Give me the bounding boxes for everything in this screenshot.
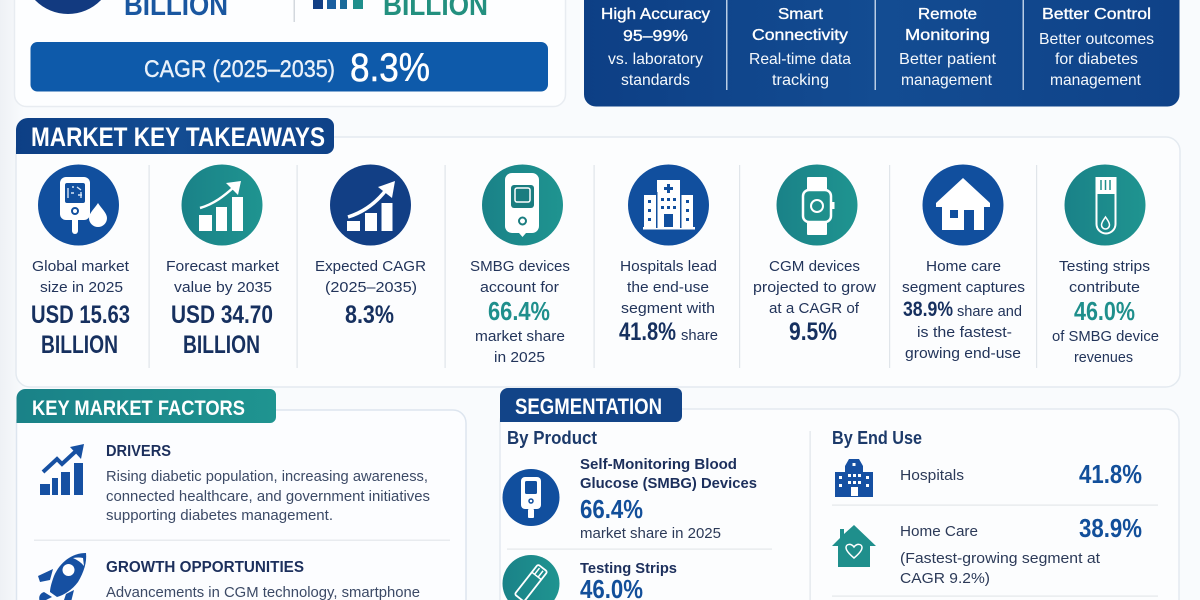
takeaway: global market size: size in 2025 (40, 279, 123, 296)
heading: key market factors: KEY MARKET FACTORS (32, 397, 245, 420)
text: growth opportunities (106, 559, 420, 600)
column: by product: By Product (507, 428, 597, 448)
icon: home with heart (832, 525, 876, 567)
takeaway: hospitals: 41.8% (619, 318, 676, 346)
heading: segmentation: SEGMENTATION (515, 394, 662, 419)
item: SMBG devices: Self-Monitoring Blood (580, 456, 737, 473)
takeaway: home care: 38.9% (903, 298, 953, 321)
takeaway: testing strips (1052, 164, 1159, 366)
CAGR banner (30, 42, 548, 92)
item: home care (900, 513, 1142, 587)
column: by product (502, 428, 772, 600)
column: by end use (832, 428, 1158, 597)
takeaway: testing strips: revenues (1074, 349, 1133, 366)
takeaway: CGM devices: 9.5% (789, 318, 837, 346)
benefit: high accuracy (601, 6, 710, 89)
benefit: high accuracy: standards (621, 72, 690, 89)
heading: segmentation (500, 388, 682, 422)
icon: hospital (628, 164, 709, 246)
panel: segmentation (500, 388, 1179, 600)
icon: rising bars navy (330, 164, 411, 246)
takeaway: global market size: Global market (32, 258, 130, 275)
icon: market size circle (22, 0, 114, 14)
takeaway: SMBG devices: in 2025 (494, 349, 545, 366)
takeaway: home care: share and (957, 303, 1022, 320)
takeaway: global market size: USD 15.63 (31, 301, 130, 329)
takeaway: testing strips: Testing strips (1059, 258, 1150, 275)
takeaway: forecast value: Forecast market (166, 258, 280, 275)
item: hospitals: Hospitals (900, 467, 964, 484)
benefit: better control: Better outcomes (1039, 31, 1154, 48)
takeaway: home care (902, 164, 1025, 362)
item: testing strips (580, 560, 677, 600)
item: home care: (Fastest-growing segment at (900, 550, 1101, 567)
icon: hospital small (835, 459, 873, 497)
takeaway: SMBG devices: market share (475, 328, 565, 345)
takeaway: testing strips: of SMBG device (1052, 328, 1159, 345)
benefit: remote monitoring: management (901, 72, 993, 89)
item: hospitals (900, 459, 1142, 489)
heading: key market factors (16, 389, 276, 423)
benefit: better control: Better Control (1042, 6, 1151, 23)
takeaway: CGM devices: CGM devices (769, 258, 860, 275)
benefit: smart connectivity: tracking (772, 72, 829, 89)
icon: rocket (38, 553, 86, 600)
takeaway: CGM devices: projected to grow (753, 279, 876, 296)
benefit: smart connectivity: Smart (778, 6, 824, 23)
takeaway: SMBG devices: 66.4% (488, 296, 550, 326)
text: drivers: connected healthcare, and government initiatives (106, 488, 430, 505)
takeaway: hospitals (619, 164, 718, 346)
benefit: high accuracy: High Accuracy (601, 6, 710, 23)
item: home care: Home Care (900, 523, 978, 540)
item: SMBG devices: Glucose (SMBG) Devices (580, 475, 757, 492)
takeaway: CGM devices (753, 164, 876, 346)
takeaway: hospitals: share (681, 327, 718, 344)
benefit: high accuracy: vs. laboratory (608, 51, 703, 68)
item: home care: CAGR 9.2%) (900, 570, 990, 587)
icon: SMBG device (482, 164, 563, 246)
icon: glucose meter with drop (38, 164, 119, 246)
panel: product benefits (584, 0, 1180, 106)
column: by end use: By End Use (832, 428, 922, 448)
benefit: better control: management (1050, 72, 1142, 89)
icon: smartwatch (776, 164, 858, 246)
takeaway: SMBG devices: account for (480, 279, 559, 296)
panel: market size summary (14, 0, 566, 106)
takeaway: home care: Home care (926, 258, 1001, 275)
icon: drivers chart (40, 444, 84, 495)
item: SMBG devices: market share in 2025 (580, 525, 721, 542)
icon: testing strip (502, 555, 560, 600)
takeaway: hospitals: the end-use (627, 279, 709, 296)
benefit: remote monitoring (899, 6, 997, 89)
icon: house (922, 164, 1004, 246)
item: hospitals: 41.8% (1079, 459, 1142, 489)
icon: test strip (1064, 164, 1146, 246)
takeaway: home care: growing end-use (905, 345, 1021, 362)
takeaway: global market size (31, 164, 130, 359)
benefit: smart connectivity: Real-time data (749, 51, 851, 68)
takeaway: home care: segment captures (902, 279, 1025, 296)
CAGR banner: 8.3% (350, 46, 430, 90)
text: drivers (106, 443, 430, 524)
takeaway: hospitals: segment with (621, 300, 715, 317)
benefit: remote monitoring: Better patient (899, 51, 997, 68)
takeaway: forecast value (166, 164, 280, 359)
takeaway: testing strips: contribute (1069, 279, 1140, 296)
item: testing strips: Testing Strips (580, 560, 677, 577)
takeaway: forecast value: USD 34.70 (171, 301, 273, 329)
item: home care: 38.9% (1079, 513, 1142, 543)
benefit: smart connectivity: Connectivity (752, 27, 848, 44)
takeaway: expected CAGR (315, 164, 426, 329)
takeaway: testing strips: 46.0% (1074, 296, 1135, 326)
item: SMBG devices: 66.4% (580, 494, 643, 524)
text: drivers: supporting diabetes management. (106, 507, 333, 524)
text: drivers: DRIVERS (106, 443, 171, 460)
CAGR banner: CAGR (2025–2035) (144, 56, 335, 83)
benefit: remote monitoring: Remote (918, 6, 977, 23)
item: SMBG devices (580, 456, 757, 542)
takeaway: expected CAGR: 8.3% (345, 301, 394, 329)
takeaway: forecast value: BILLION (183, 331, 260, 359)
benefit: smart connectivity (749, 6, 851, 89)
panel: key market factors (16, 389, 466, 600)
takeaway: home care: is the fastest- (917, 324, 1012, 341)
takeaway: global market size: BILLION (41, 331, 118, 359)
panel: market key takeaways (16, 118, 1180, 387)
takeaway: expected CAGR: (2025–2035) (325, 279, 417, 296)
text: drivers: Rising diabetic population, increasing awareness, (106, 468, 428, 485)
icon: SMBG meter (502, 469, 560, 526)
benefit: better control: for diabetes (1055, 51, 1138, 68)
benefit: high accuracy: 95–99% (623, 28, 688, 45)
icon: rising bars teal (182, 164, 262, 246)
takeaway: CGM devices: at a CAGR of (769, 300, 860, 317)
heading: market key takeaways: MARKET KEY TAKEAWAYS (31, 122, 325, 152)
benefit: better control (1039, 6, 1154, 89)
takeaway: hospitals: Hospitals lead (620, 258, 717, 275)
benefit: remote monitoring: Monitoring (905, 27, 990, 44)
icon: forecast bars (313, 0, 363, 9)
takeaway: SMBG devices: SMBG devices (470, 258, 570, 275)
takeaway: forecast value: value by 2035 (174, 279, 272, 296)
takeaway: expected CAGR: Expected CAGR (315, 258, 426, 275)
takeaway: SMBG devices (470, 164, 570, 366)
text: growth opportunities: GROWTH OPPORTUNITIES (106, 559, 304, 576)
